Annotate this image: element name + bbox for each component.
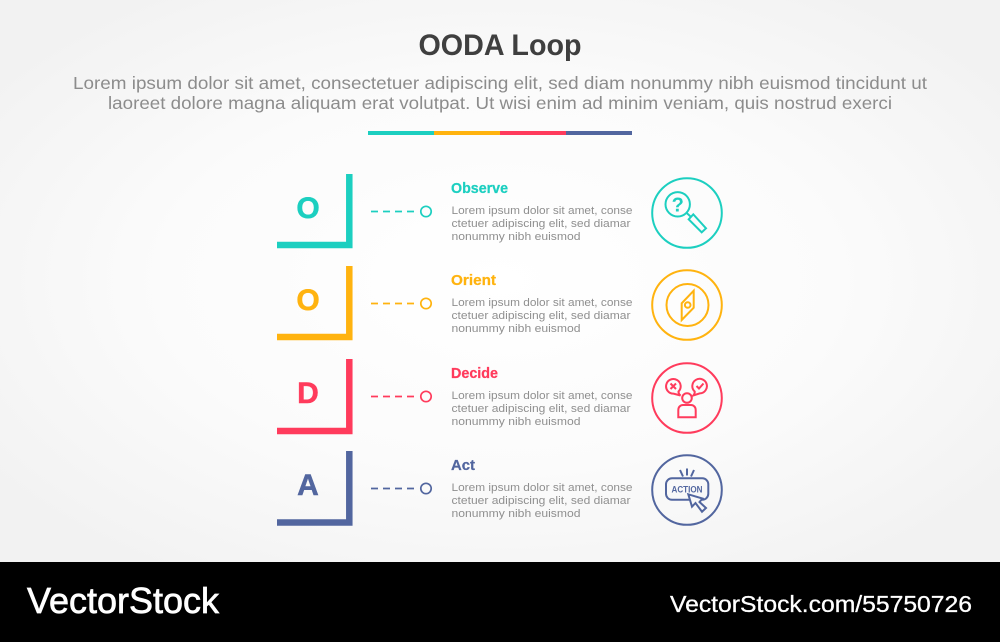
body text: ctetuer adipiscing elit, sed diamar: [452, 310, 631, 322]
body text: Lorem ipsum dolor sit amet, conse: [452, 482, 632, 494]
footer url: VectorStock.com/55750726: [670, 591, 972, 617]
body text: ctetuer adipiscing elit, sed diamar: [452, 403, 631, 415]
icon: action button with cursor: ACTION: [672, 484, 703, 494]
body text: Lorem ipsum dolor sit amet, conse: [452, 297, 632, 309]
body text: [452, 297, 632, 335]
icon: compass: [652, 270, 722, 340]
body text: [452, 482, 632, 520]
body text: nonummy nibh euismod: [452, 231, 580, 243]
dashed connector: [371, 483, 431, 494]
heading: Observe: Observe: [451, 181, 508, 197]
icon: action button with cursor: [652, 455, 722, 525]
dashed connector: [371, 298, 431, 309]
dashed connector: [371, 391, 431, 402]
bracket and letter O: O: [296, 284, 320, 317]
footer logo text: VectorStock: [27, 580, 220, 621]
row: Act: [277, 451, 722, 525]
row: Orient: [277, 266, 722, 340]
icon: magnifying glass with question mark: ?: [672, 194, 684, 216]
bracket and letter D: D: [297, 377, 319, 410]
bracket and letter O: [277, 266, 349, 337]
subtitle text: [73, 73, 927, 113]
subtitle text: laoreet dolore magna aliquam erat volutpat. Ut wisi enim ad minim veniam, quis nostrud exerci: [108, 93, 892, 113]
body text: Lorem ipsum dolor sit amet, conse: [452, 205, 632, 217]
body text: [452, 205, 632, 243]
body text: ctetuer adipiscing elit, sed diamar: [452, 218, 631, 230]
heading: Decide: Decide: [451, 366, 498, 382]
dashed connector: [371, 206, 431, 217]
heading: Orient: Orient: [451, 273, 496, 289]
icon: person deciding between cross and check: [652, 363, 722, 433]
bracket and letter A: A: [297, 469, 319, 502]
body text: [452, 390, 632, 428]
bracket and letter D: [277, 359, 349, 431]
body text: Lorem ipsum dolor sit amet, conse: [452, 390, 632, 402]
row: Decide: [277, 359, 722, 433]
colour divider bar: [368, 131, 632, 135]
bracket and letter O: [277, 174, 349, 245]
heading: Act: Act: [451, 458, 475, 474]
subtitle text: Lorem ipsum dolor sit amet, consectetuer adipiscing elit, sed diam nonummy nibh euismod tincidunt ut: [73, 73, 927, 93]
body text: nonummy nibh euismod: [452, 323, 580, 335]
icon: magnifying glass with question mark: [652, 178, 722, 248]
body text: nonummy nibh euismod: [452, 416, 580, 428]
body text: nonummy nibh euismod: [452, 508, 580, 520]
footer bar: [0, 562, 1000, 642]
row: Observe: [277, 174, 722, 248]
bracket and letter A: [277, 451, 349, 522]
bracket and letter O: O: [296, 192, 320, 225]
body text: ctetuer adipiscing elit, sed diamar: [452, 495, 631, 507]
title: OODA Loop: [418, 29, 582, 62]
